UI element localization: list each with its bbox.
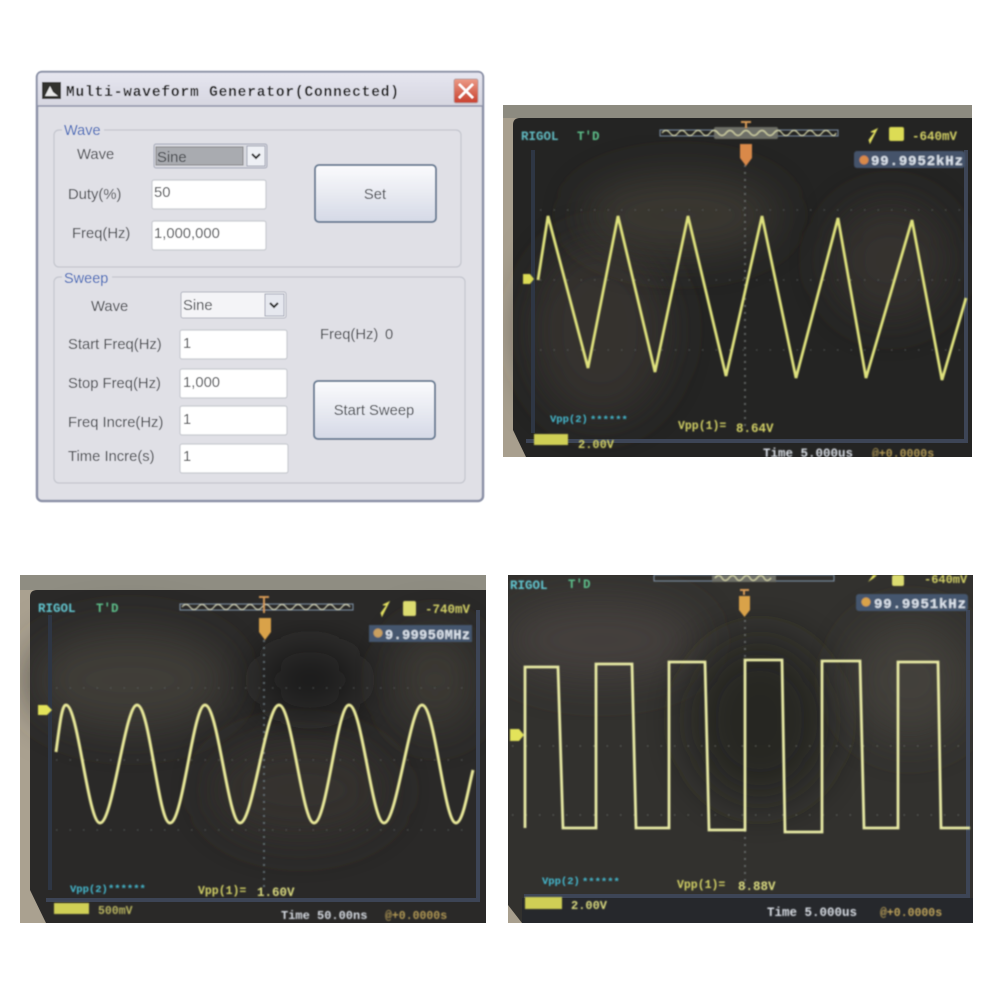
scope readouts: ****** bbox=[590, 415, 628, 427]
scope readouts: T'D bbox=[568, 578, 591, 592]
panel: Sweep group: 1 bbox=[183, 449, 191, 465]
panel: Wave group bbox=[54, 123, 461, 267]
scope readouts: 2.00V bbox=[571, 899, 608, 913]
scope readouts: RIGOL bbox=[510, 579, 548, 593]
panel: Wave group: Duty(%) bbox=[68, 187, 122, 203]
scope readouts bbox=[521, 122, 965, 461]
scope readouts: 8.64V bbox=[736, 422, 774, 436]
button: Start Sweep bbox=[314, 381, 435, 439]
scope readouts: 2.00V bbox=[578, 438, 615, 452]
scope readouts: -640mV bbox=[912, 130, 958, 144]
scope readouts: Vpp(1)= bbox=[198, 885, 246, 898]
scope readouts: -740mV bbox=[425, 603, 471, 617]
scope readouts: -640mV bbox=[924, 573, 968, 587]
scope readouts: T'D bbox=[96, 602, 119, 616]
panel: Sweep group: 1,000 bbox=[183, 375, 220, 391]
panel: Sweep group: Start Freq(Hz) bbox=[68, 337, 162, 353]
scope readouts: 9.99950MHz bbox=[385, 629, 470, 644]
square waveform bbox=[525, 660, 970, 832]
panel: Sweep group: 1 bbox=[183, 336, 191, 352]
panel: Wave group: Freq(Hz) bbox=[72, 226, 130, 242]
scope readouts: RIGOL bbox=[521, 130, 559, 144]
scope readouts: 1.60V bbox=[257, 886, 295, 900]
scope readouts: ****** bbox=[582, 877, 620, 889]
scope readouts: Vpp(2) bbox=[550, 414, 588, 426]
scope readouts: @+0.0000s bbox=[880, 907, 942, 920]
panel: oscilloscope sine wave bbox=[20, 575, 486, 923]
panel: Wave group: Wave bbox=[77, 147, 114, 163]
panel: Wave group: 1,000,000 bbox=[154, 226, 220, 242]
scope readouts: 99.9952kHz bbox=[871, 154, 963, 170]
scope readouts: @+0.0000s bbox=[385, 910, 447, 923]
scope readouts: Time 5.000us bbox=[763, 447, 853, 461]
panel: Sweep group: Freq Incre(Hz) bbox=[68, 415, 163, 431]
panel: software window bbox=[37, 72, 483, 501]
panel: oscilloscope square wave bbox=[500, 573, 973, 923]
scope readouts: Vpp(2) bbox=[70, 884, 108, 896]
scope readouts: @+0.0000s bbox=[872, 448, 934, 461]
panel: Sweep group: Freq(Hz) bbox=[320, 327, 378, 343]
scope readouts bbox=[38, 597, 472, 923]
panel: Sweep group: Time Incre(s) bbox=[68, 449, 155, 465]
scope readouts: Time 5.000us bbox=[767, 906, 857, 920]
button: Start Sweep: Start Sweep bbox=[334, 403, 414, 419]
panel: Sweep group bbox=[54, 271, 465, 483]
panel: oscilloscope triangle wave bbox=[503, 105, 972, 461]
scope readouts bbox=[510, 573, 968, 920]
scope readouts: 500mV bbox=[98, 905, 133, 918]
scope readouts: Time 50.00ns bbox=[281, 909, 367, 923]
scope readouts: Vpp(1)= bbox=[677, 879, 725, 892]
button: Set bbox=[315, 165, 436, 222]
button: Set: Set bbox=[364, 187, 386, 203]
panel: Sweep group: Wave bbox=[91, 299, 128, 315]
panel: Sweep group: Stop Freq(Hz) bbox=[68, 376, 161, 392]
scope readouts: 99.9951kHz bbox=[874, 597, 966, 613]
window title bar: Multi-waveform Generator(Connected) bbox=[66, 85, 399, 101]
panel: Sweep group: 0 bbox=[385, 327, 393, 343]
window title bar bbox=[37, 72, 483, 106]
scope readouts: ****** bbox=[108, 884, 146, 896]
panel: Sweep group: Sine bbox=[183, 298, 213, 314]
panel: Sweep group: 1 bbox=[183, 412, 191, 428]
panel: Sweep group: Sweep bbox=[64, 271, 108, 287]
sine waveform bbox=[56, 705, 473, 823]
scope readouts: Vpp(2) bbox=[542, 876, 580, 888]
panel: Wave group: Sine bbox=[157, 150, 187, 166]
scope readouts: Vpp(1)= bbox=[678, 420, 726, 433]
scope readouts: RIGOL bbox=[38, 602, 76, 616]
panel: Wave group: Wave bbox=[64, 123, 101, 139]
scope readouts: T'D bbox=[577, 130, 600, 144]
scope readouts: 8.88V bbox=[738, 880, 776, 894]
panel: Wave group: 50 bbox=[154, 185, 170, 201]
triangle waveform bbox=[538, 216, 966, 380]
